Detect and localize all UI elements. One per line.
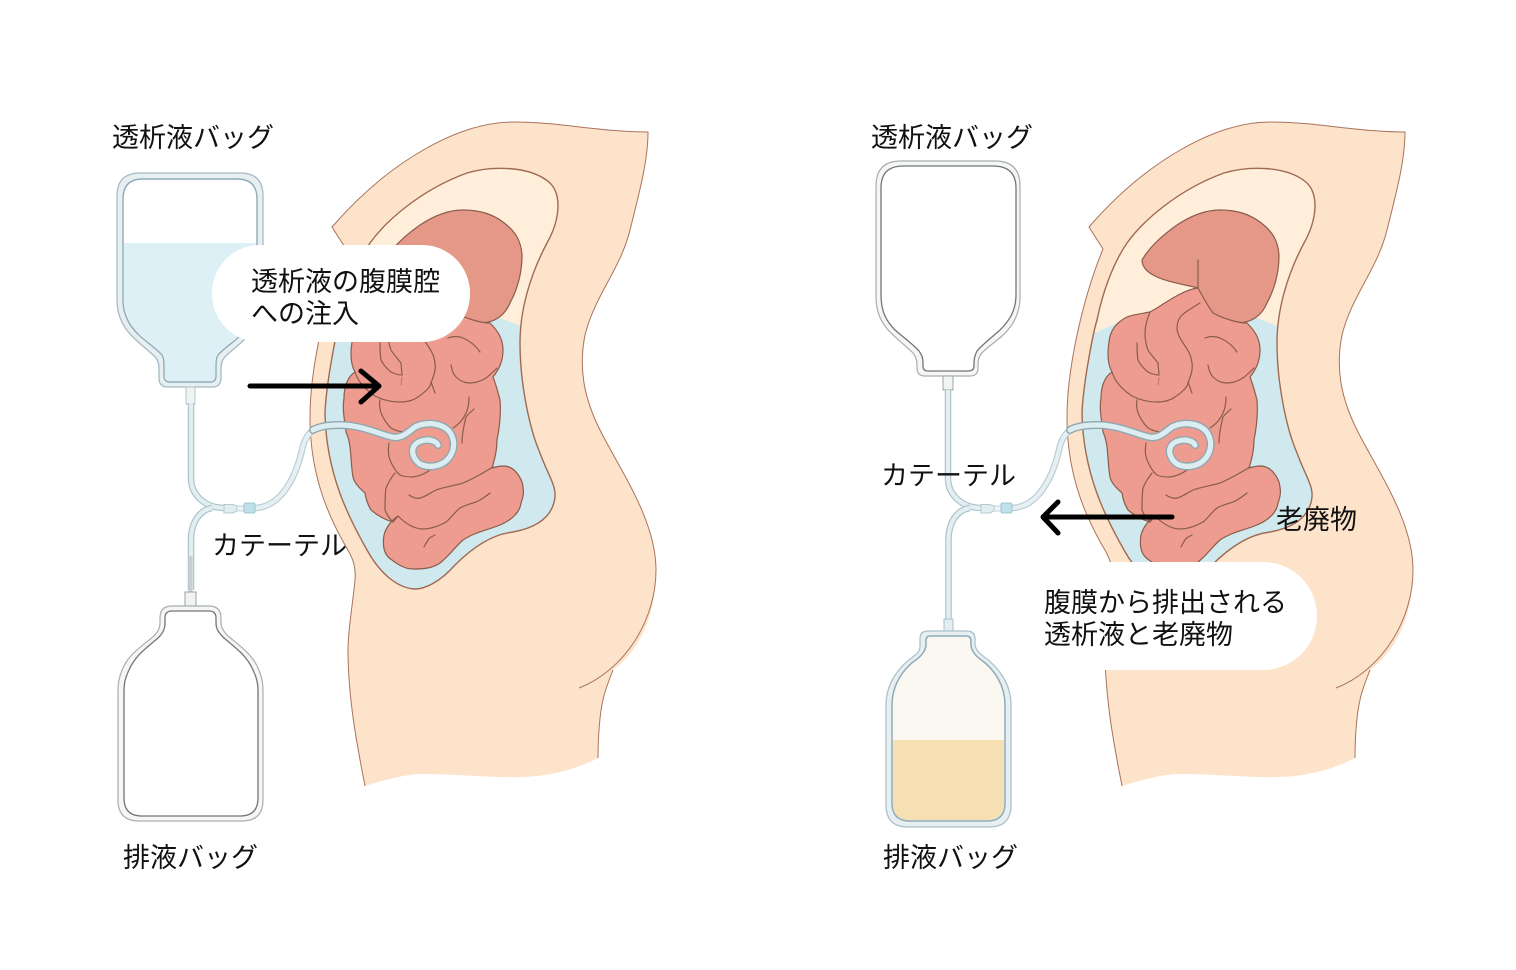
intestines: [343, 288, 523, 569]
tubing from dialysate bag: [185, 387, 225, 606]
callout: infusion into peritoneal cavity: への注入: [251, 299, 359, 329]
label: catheter: カテーテル: [212, 531, 347, 561]
arrow: inflow: [250, 371, 379, 402]
label: catheter: カテーテル: [881, 461, 1016, 491]
icon: dialysate bag with fluid: [117, 173, 263, 387]
connector: [981, 503, 1012, 513]
tubing to drain bag: [943, 376, 982, 631]
label: waste products: 老廃物: [1276, 505, 1357, 535]
callout: drained dialysate and waste: 透析液と老廃物: [1044, 620, 1233, 650]
icon: empty dialysate bag: [876, 161, 1020, 376]
label: drain bag: 排液バッグ: [883, 843, 1018, 873]
callout: infusion into peritoneal cavity: [212, 245, 470, 342]
abdominal cavity with dialysate: [320, 168, 570, 600]
label: dialysate bag: 透析液バッグ: [112, 123, 274, 153]
catheter coil: [255, 424, 454, 508]
callout: infusion into peritoneal cavity: 透析液の腹膜腔: [251, 267, 440, 297]
catheter coil: [1012, 424, 1211, 508]
stomach: [385, 210, 522, 323]
body silhouette: [310, 122, 656, 786]
callout: drained dialysate and waste: [1005, 562, 1317, 670]
left panel: dialysate infusion: [112, 122, 656, 873]
icon: empty drain bag: [118, 606, 263, 821]
intestines: [1100, 288, 1280, 569]
callout: drained dialysate and waste: 腹膜から排出される: [1044, 588, 1287, 618]
label: drain bag: 排液バッグ: [123, 843, 258, 873]
right panel: drainage: [871, 122, 1413, 873]
icon: drain bag with waste fluid: [886, 631, 1011, 827]
abdominal cavity with dialysate: [1077, 168, 1327, 600]
body silhouette: [1067, 122, 1413, 786]
stomach: [1142, 210, 1279, 323]
arrow: outflow: [1043, 502, 1172, 533]
label: dialysate bag: 透析液バッグ: [871, 123, 1033, 153]
connector: [224, 503, 255, 513]
